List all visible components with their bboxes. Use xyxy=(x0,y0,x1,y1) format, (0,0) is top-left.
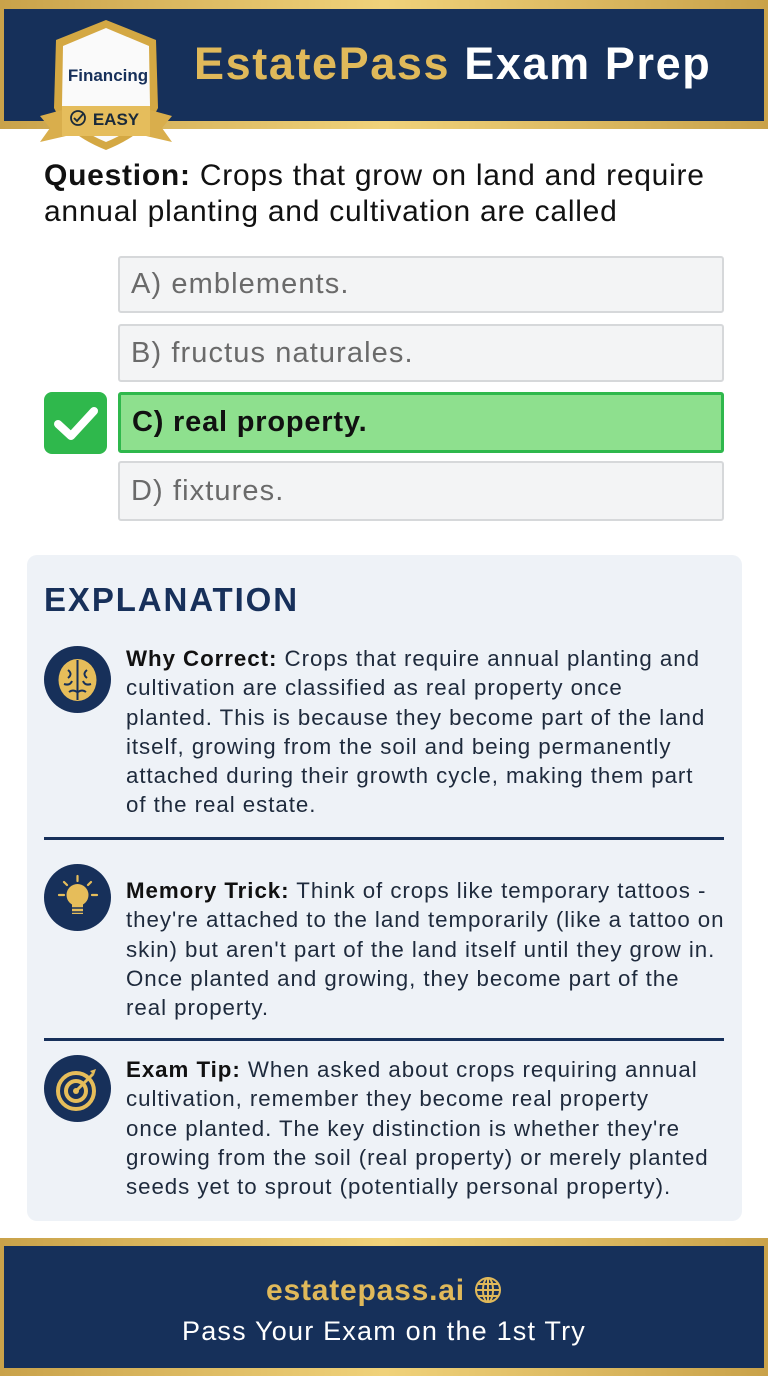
text: memory trick: real property. xyxy=(126,995,269,1020)
option C correct xyxy=(118,392,724,453)
text: memory trick: skin) but aren't part of the land itself until they grow in. xyxy=(126,937,715,962)
icon: brain xyxy=(44,646,111,713)
option B xyxy=(118,324,724,382)
text: memory trick: Once planted and growing, they become part of the xyxy=(126,966,680,991)
text: exam tip xyxy=(126,1057,709,1199)
text: why correct: itself, growing from the soil and being permanently xyxy=(126,734,671,759)
text: why correct xyxy=(126,646,705,817)
text: exam tip: seeds yet to sprout (potentially personal property). xyxy=(126,1174,671,1199)
header banner xyxy=(0,0,768,129)
text: exam tip: cultivation, remember they become real property xyxy=(126,1086,649,1111)
text: why correct: cultivation are classified as real property once xyxy=(126,675,623,700)
footer tagline: Pass Your Exam on the 1st Try xyxy=(182,1316,586,1346)
option A xyxy=(118,256,724,313)
badge: Financing EASY: Financing xyxy=(68,66,148,85)
text: memory trick: Memory Trick: Think of crops like temporary tattoos - xyxy=(126,878,706,903)
badge: Financing EASY: EASY xyxy=(93,110,140,129)
option B: B) fructus naturales. xyxy=(131,336,414,368)
text: why correct: Why Correct: Crops that require annual planting and xyxy=(126,646,700,671)
badge: Financing EASY xyxy=(40,20,172,150)
question xyxy=(44,159,705,228)
option A: A) emblements. xyxy=(131,268,349,300)
option D: D) fixtures. xyxy=(131,474,284,506)
text: exam tip: once planted. The key distinction is whether they're xyxy=(126,1116,680,1141)
heading: EXPLANATION xyxy=(44,581,299,618)
text: exam tip: Exam Tip: When asked about crops requiring annual xyxy=(126,1057,698,1082)
footer xyxy=(0,1238,768,1376)
question: annual planting and cultivation are called xyxy=(44,195,618,228)
icon: light bulb xyxy=(44,864,111,931)
text: why correct: attached during their growth cycle, making them part xyxy=(126,763,693,788)
icon: target xyxy=(44,1055,111,1122)
text: memory trick: they're attached to the land temporarily (like a tattoo on xyxy=(126,907,725,932)
option C correct: C) real property. xyxy=(132,406,367,438)
text: why correct: planted. This is because they become part of the land xyxy=(126,705,705,730)
text: exam tip: growing from the soil (real property) or merely planted xyxy=(126,1145,709,1170)
footer url: estatepass.ai xyxy=(266,1274,465,1307)
title: EstatePass Exam Prep xyxy=(194,38,711,89)
text: why correct: of the real estate. xyxy=(126,792,316,817)
text: memory trick xyxy=(126,878,725,1020)
panel: explanation xyxy=(27,555,742,1221)
check icon xyxy=(44,392,107,454)
question: Question: Crops that grow on land and require xyxy=(44,159,705,192)
option D xyxy=(118,461,724,521)
